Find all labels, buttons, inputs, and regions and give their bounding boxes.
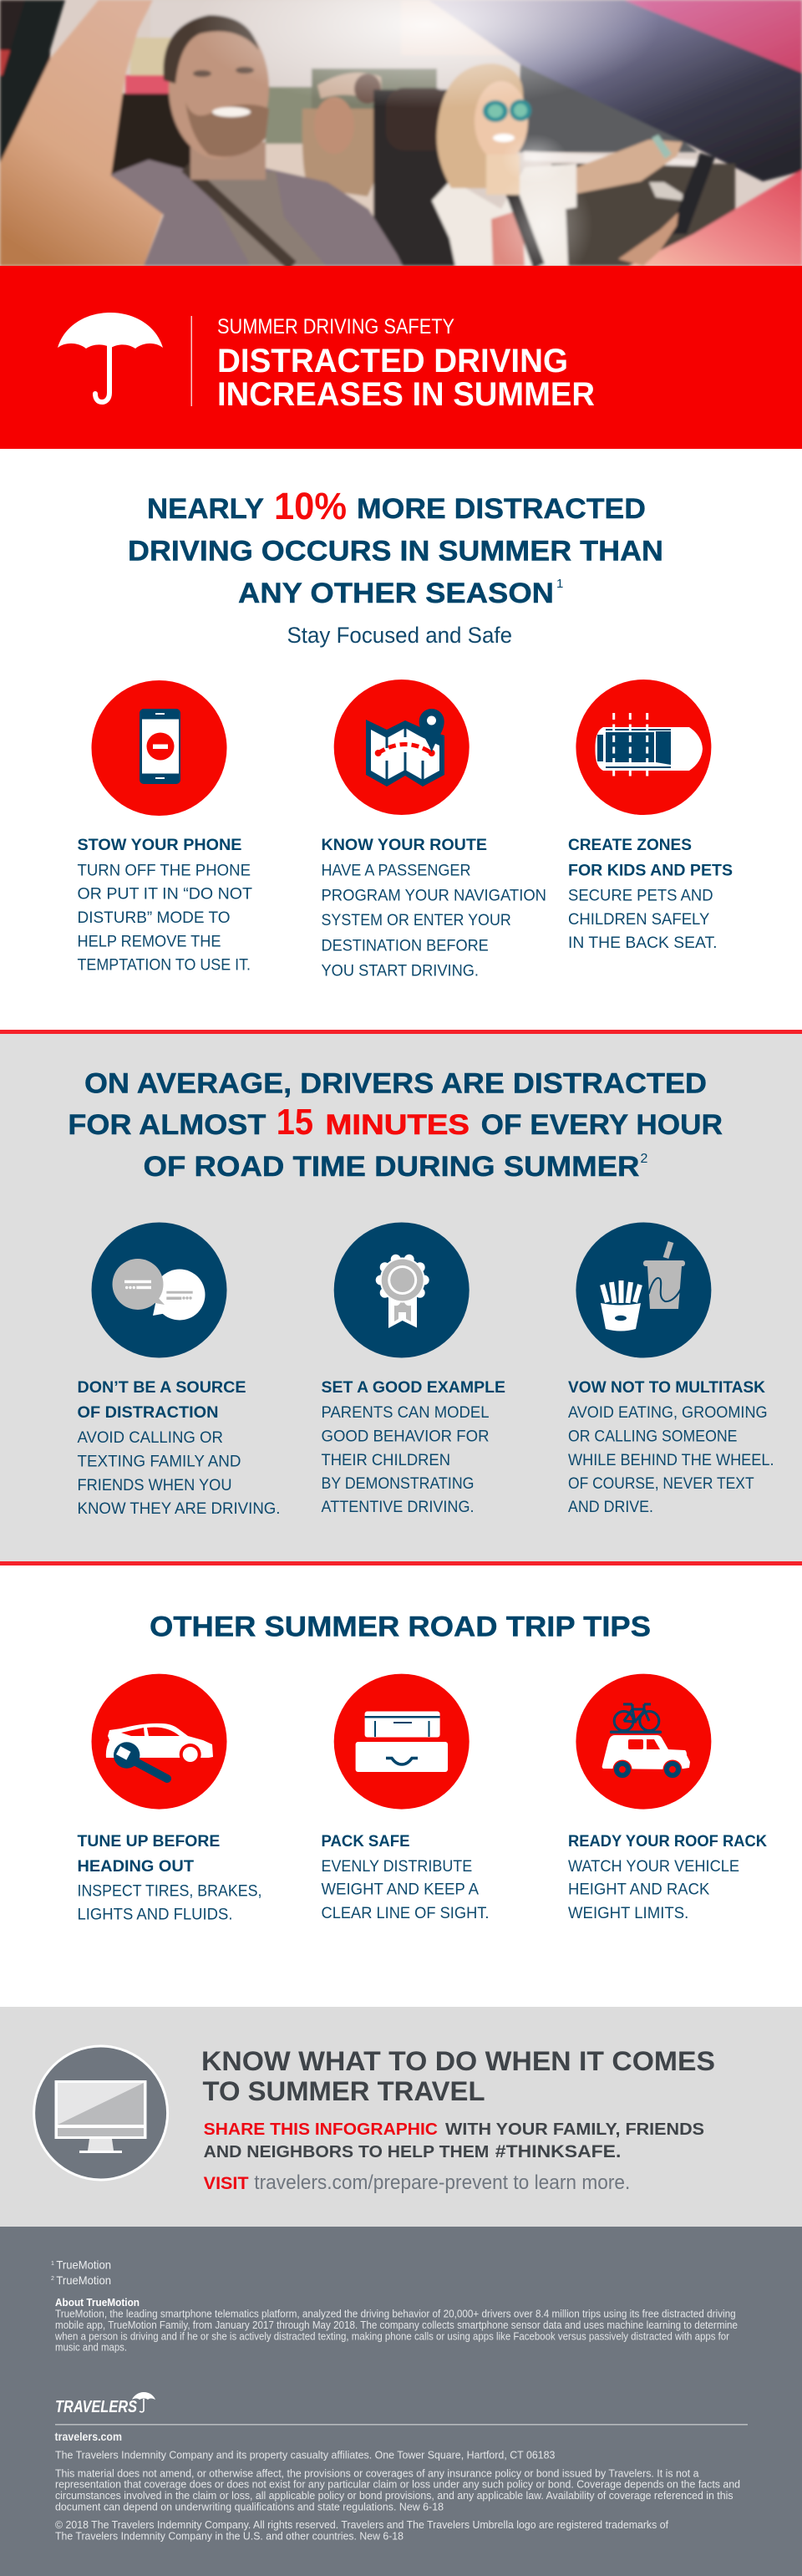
text: vow not to multitask (568, 1378, 774, 1516)
text: vow not to multitask: AND DRIVE. (568, 1499, 653, 1516)
icon: car and wrench (92, 1674, 227, 1810)
heading: nearly 10%: 10% (274, 485, 347, 527)
icon: luggage (334, 1674, 470, 1810)
legal text: This material does not amend, or otherwise affect, the provisions or coverages of any insurance policy or bond issued by Travelers. It is not a (55, 2467, 699, 2479)
heading: know what to do (201, 2046, 715, 2106)
text: stow your phone (77, 836, 252, 975)
banner title: DISTRACTED DRIVING (217, 343, 568, 379)
heading: 15 minutes: OF EVERY HOUR (481, 1109, 723, 1141)
heading: 15 minutes (68, 1067, 723, 1183)
legal text: circumstances involved in the claim or loss, all applicable policy or bond provisions, and any applicable law. Availability of coverage referenced in this (55, 2490, 733, 2502)
text: know your route: DESTINATION BEFORE (321, 938, 489, 955)
icon: Travelers umbrella (58, 313, 163, 402)
footnotes (51, 2258, 111, 2287)
about TrueMotion (54, 2296, 738, 2354)
icon: speech bubbles (92, 1222, 227, 1357)
text: roof rack: READY YOUR ROOF RACK (568, 1832, 767, 1851)
text: visit travelers.com: travelers.com/prepare-prevent to learn more. (254, 2171, 630, 2194)
Travelers logo: TRAVELERS (55, 2398, 138, 2416)
text: don't be a source: DON’T BE A SOURCE (77, 1378, 246, 1397)
text: roof rack: HEIGHT AND RACK (568, 1881, 710, 1899)
about TrueMotion: music and maps. (55, 2342, 127, 2354)
legal text: The Travelers Indemnity Company in the U.S. and other countries. New 6-18 (55, 2530, 404, 2542)
banner eyebrow: SUMMER DRIVING SAFETY (217, 315, 454, 339)
text: vow not to multitask: WHILE BEHIND THE WHEEL. (568, 1452, 774, 1469)
text: set a good example: SET A GOOD EXAMPLE (321, 1378, 505, 1397)
text: share this infographic: WITH YOUR FAMILY, FRIENDS (445, 2120, 704, 2139)
text: stow your phone: STOW YOUR PHONE (77, 836, 242, 854)
red title banner (0, 266, 802, 449)
text: stow your phone: TURN OFF THE PHONE (77, 862, 251, 879)
heading: nearly 10%: 1 (556, 577, 563, 591)
text: tune up (77, 1832, 262, 1924)
icon: car with zones (576, 680, 711, 815)
text: roof rack (568, 1832, 767, 1922)
icon: phone (92, 680, 227, 816)
legal text: travelers.com (55, 2430, 122, 2443)
panel: share call to action (0, 2007, 802, 2227)
text: set a good example (321, 1378, 505, 1516)
heading: nearly 10% (128, 485, 663, 609)
heading: nearly 10%: DRIVING OCCURS IN SUMMER THAN (128, 535, 663, 567)
text: share this infographic: #THINKSAFE. (495, 2142, 621, 2161)
icon: car with roof rack (576, 1674, 711, 1810)
footnotes: 1 (51, 2261, 54, 2267)
text: know your route: HAVE A PASSENGER (321, 862, 471, 879)
text: roof rack: WEIGHT LIMITS. (568, 1905, 688, 1922)
text: tune up: INSPECT TIRES, BRAKES, (77, 1883, 262, 1901)
text: share this infographic: AND NEIGHBORS TO HELP THEM (204, 2143, 489, 2161)
panel: stay focused (0, 449, 802, 1030)
legal text: representation that coverage does or does not exist for any particular claim or loss under any such policy or bond. Coverage depends on the facts and (55, 2479, 740, 2491)
heading: 15 minutes: MINUTES (326, 1109, 470, 1141)
hero photo: friends in a car (0, 0, 802, 284)
text: create zones: CHILDREN SAFELY (568, 911, 710, 929)
text: don't be a source (77, 1378, 281, 1518)
text: set a good example: BY DEMONSTRATING (321, 1475, 475, 1493)
footnotes: TrueMotion (56, 2258, 111, 2272)
text: create zones: IN THE BACK SEAT. (568, 934, 717, 952)
text: know your route: YOU START DRIVING. (321, 963, 479, 980)
about TrueMotion: TrueMotion, the leading smartphone telematics platform, analyzed the driving behavior of 20,000+ drivers over 8.4 million trips using its free distracted driving (55, 2309, 736, 2320)
text: share this infographic: SHARE THIS INFOGRAPHIC (204, 2120, 438, 2139)
text: pack safe (321, 1832, 490, 1922)
icon: map with pin (334, 680, 470, 815)
legal text: © 2018 The Travelers Indemnity Company. All rights reserved. Travelers and The Travelers Umbrella logo are registered trademarks of (55, 2519, 669, 2531)
heading: 15 minutes: OF ROAD TIME DURING SUMMER (144, 1151, 640, 1183)
text: vow not to multitask: AVOID EATING, GROOMING (568, 1404, 768, 1422)
text: pack safe: PACK SAFE (321, 1832, 409, 1851)
text: don't be a source: AVOID CALLING OR (77, 1429, 223, 1447)
text: set a good example: PARENTS CAN MODEL (321, 1404, 490, 1422)
banner title (217, 343, 595, 413)
footnotes: 2 (51, 2276, 54, 2282)
panel: other road trip tips (0, 1565, 802, 2007)
about TrueMotion: when a person is driving and if he or she is actively distracted texting, making phone calls or using apps like Facebook versus passively distracted with apps for (54, 2330, 729, 2342)
footnotes: TrueMotion (56, 2273, 111, 2287)
heading: nearly 10%: NEARLY (147, 493, 264, 525)
text: know your route: PROGRAM YOUR NAVIGATION (321, 887, 546, 904)
icon: award ribbon (334, 1222, 470, 1357)
heading: know what to do: TO SUMMER TRAVEL (202, 2076, 485, 2106)
heading: 15 minutes: FOR ALMOST (68, 1109, 266, 1141)
text: pack safe: WEIGHT AND KEEP A (321, 1881, 479, 1899)
heading: nearly 10%: ANY OTHER SEASON (238, 578, 554, 609)
text: pack safe: EVENLY DISTRIBUTE (321, 1858, 472, 1876)
text: know your route (321, 836, 546, 980)
text: set a good example: GOOD BEHAVIOR FOR (321, 1428, 490, 1446)
text: create zones (568, 836, 733, 952)
text: stow your phone: HELP REMOVE THE (77, 933, 221, 950)
panel: 15 minutes (0, 1030, 802, 1565)
heading: know what to do: KNOW WHAT TO DO WHEN IT COMES (201, 2046, 715, 2076)
icon: computer monitor (33, 2044, 169, 2181)
legal text: document can depend on underwriting qualifications and state regulations. New 6-18 (55, 2501, 444, 2512)
legal text: The Travelers Indemnity Company and its property casualty affiliates. One Tower Square, Hartford, CT 06183 (55, 2450, 555, 2461)
legal text (55, 2430, 740, 2542)
text: know your route: SYSTEM OR ENTER YOUR (321, 912, 511, 929)
text: tune up: HEADING OUT (77, 1857, 194, 1876)
text: don't be a source: TEXTING FAMILY AND (77, 1453, 241, 1470)
text: tune up: TUNE UP BEFORE (77, 1832, 220, 1851)
about TrueMotion: About TrueMotion (55, 2296, 140, 2309)
text: visit travelers.com: VISIT (204, 2174, 249, 2193)
text: create zones: FOR KIDS AND PETS (568, 861, 733, 879)
text: set a good example: THEIR CHILDREN (321, 1452, 450, 1469)
heading: 15 minutes: 15 (277, 1102, 313, 1143)
subheading: Stay Focused and Safe (287, 623, 512, 648)
text: stow your phone: DISTURB” MODE TO (77, 909, 231, 927)
text: create zones: CREATE ZONES (568, 836, 692, 854)
panel: footer (0, 2227, 802, 2576)
text: roof rack: WATCH YOUR VEHICLE (568, 1858, 739, 1876)
heading: nearly 10%: MORE DISTRACTED (357, 493, 646, 525)
text: vow not to multitask: OR CALLING SOMEONE (568, 1428, 737, 1446)
heading: other tips: OTHER SUMMER ROAD TRIP TIPS (150, 1611, 651, 1642)
icon: fries and drink (576, 1222, 711, 1357)
text: don't be a source: KNOW THEY ARE DRIVING. (77, 1500, 281, 1518)
text: know your route: KNOW YOUR ROUTE (321, 836, 487, 854)
text: pack safe: CLEAR LINE OF SIGHT. (321, 1905, 490, 1922)
text: set a good example: ATTENTIVE DRIVING. (321, 1499, 475, 1516)
text: create zones: SECURE PETS AND (568, 887, 713, 904)
text: vow not to multitask: VOW NOT TO MULTITASK (568, 1378, 765, 1397)
text: stow your phone: TEMPTATION TO USE IT. (77, 957, 251, 975)
text: tune up: LIGHTS AND FLUIDS. (77, 1907, 232, 1924)
text: don't be a source: FRIENDS WHEN YOU (77, 1477, 232, 1494)
text: vow not to multitask: OF COURSE, NEVER TEXT (568, 1475, 754, 1493)
heading: 15 minutes: 2 (640, 1152, 648, 1166)
banner title: INCREASES IN SUMMER (217, 376, 595, 413)
text: don't be a source: OF DISTRACTION (77, 1403, 219, 1422)
text: stow your phone: OR PUT IT IN “DO NOT (77, 886, 252, 904)
text: share this infographic (204, 2120, 704, 2161)
heading: 15 minutes: ON AVERAGE, DRIVERS ARE DISTRACTED (84, 1067, 707, 1099)
about TrueMotion: mobile app, TrueMotion Family, from January 2017 through May 2018. The company collects smartphone sensor data and uses machine learning to determine (55, 2319, 738, 2331)
